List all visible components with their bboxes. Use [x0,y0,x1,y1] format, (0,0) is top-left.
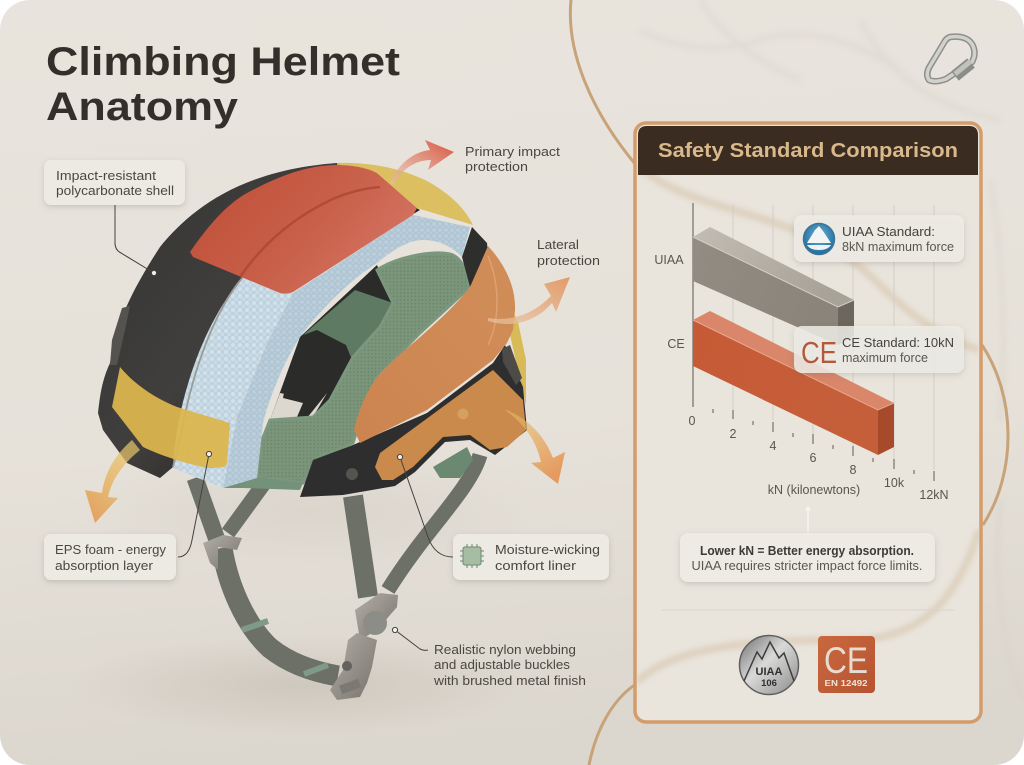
EPS foam [173,215,470,488]
label: polycarbonate shell: Impact-resistant [56,169,157,183]
callout: UIAA standard: UIAA Standard: [842,225,935,239]
label: EPS foam [44,534,176,580]
badge: UIAA 106: UIAA [756,666,782,678]
label: EPS foam: EPS foam - energy [55,543,167,557]
red impact zone [190,165,417,294]
strap: left webbing [195,478,338,676]
callout: CE standard: maximum force [842,351,928,365]
opening [270,265,393,420]
title: Anatomy [46,85,239,129]
panel: safety standard comparison [635,123,981,722]
arrow: lateral [488,277,570,324]
bar chart [654,203,949,502]
label: comfort liner: Moisture-wicking [495,543,600,557]
yellow crown zone [337,163,473,225]
label: comfort liner: comfort liner [495,559,576,573]
bar: UIAA [693,227,854,345]
title: Climbing Helmet [46,40,400,84]
axis labels [654,253,949,502]
strap keepers [242,621,328,674]
callout: takeaway: UIAA requires stricter impact force limits. [692,559,922,573]
rear harness [433,447,473,478]
label: webbing [433,643,586,688]
label: webbing: Realistic nylon webbing [434,643,576,657]
label: primary impact protection [465,145,561,174]
label: webbing: and adjustable buckles [434,658,570,672]
tick marks [713,409,934,481]
label: lateral protection: protection [537,254,600,268]
badge: UIAA 106 [740,636,798,694]
label: EPS foam: absorption layer [55,559,153,573]
title [46,40,400,129]
panel header: Safety Standard Comparison [658,140,958,162]
helmet straps [195,455,480,700]
polycarbonate shell [98,163,420,478]
label: webbing: with brushed metal finish [433,674,586,688]
bar: CE [693,311,894,455]
panel rope wash [637,165,979,682]
axis labels: 12kN [919,488,949,502]
label: primary impact protection: Primary impact [465,145,561,159]
arrow: primary impact [390,140,454,185]
axis labels: 2 [730,427,737,441]
label: polycarbonate shell: polycarbonate shell [56,184,174,198]
axis labels: 6 [810,451,817,465]
arrow: lower left [85,440,140,523]
yellow front zone [112,367,230,468]
yellow rear strip [510,305,526,405]
label: lateral protection [537,238,600,268]
axis [692,203,694,407]
gridlines [733,205,934,470]
comfort liner [257,253,470,483]
icon: mesh chip [460,544,484,568]
rope behind panel [570,0,1008,765]
axis labels: 0 [689,414,696,428]
callout connector [806,506,810,533]
callout: CE standard [794,326,964,373]
axis labels: kN (kilonewtons) [768,483,860,497]
axis labels: 10k [884,476,905,490]
inner liner back [303,290,393,360]
badge: CE EN 12492: EN 12492 [824,678,868,688]
icon: UIAA mountain [804,224,834,254]
badge: CE EN 12492: CE [824,640,868,681]
axis labels: UIAA [654,253,684,267]
axis labels: 8 [850,463,857,477]
badge: CE EN 12492 [818,636,875,693]
arrow: lower right [505,410,565,484]
buckle [330,633,377,700]
callout: takeaway [680,533,935,582]
callout: CE standard: CE Standard: 10kN [842,336,954,350]
leader dots [151,270,403,633]
orange rear zone [375,370,526,480]
callout: UIAA standard: 8kN maximum force [842,240,954,254]
label: comfort liner [453,534,609,580]
suspension strap [283,393,327,417]
label: polycarbonate shell [44,160,185,205]
axis labels: 4 [770,439,777,453]
label: primary impact protection: protection [465,160,528,174]
liner bottom trim [223,477,303,490]
orange lateral zone [354,246,515,443]
leader lines [115,205,453,650]
carabiner icon [927,37,974,81]
strap: right webbing [353,455,480,597]
panel header [638,126,978,175]
divider [662,609,955,611]
helmet [98,163,527,497]
axis labels: CE [667,337,685,351]
strap slider [203,535,398,640]
icon: CE mark: CE [801,335,837,370]
inner gap [270,393,327,420]
callout: UIAA standard [794,215,964,262]
badge: UIAA 106: 106 [761,678,777,689]
label: lateral protection: Lateral [537,238,579,252]
callout: takeaway: Lower kN = Better energy absorption. [700,544,914,558]
shell edge highlight [173,277,243,467]
black lower trim [300,345,527,497]
rear black band [462,227,488,287]
